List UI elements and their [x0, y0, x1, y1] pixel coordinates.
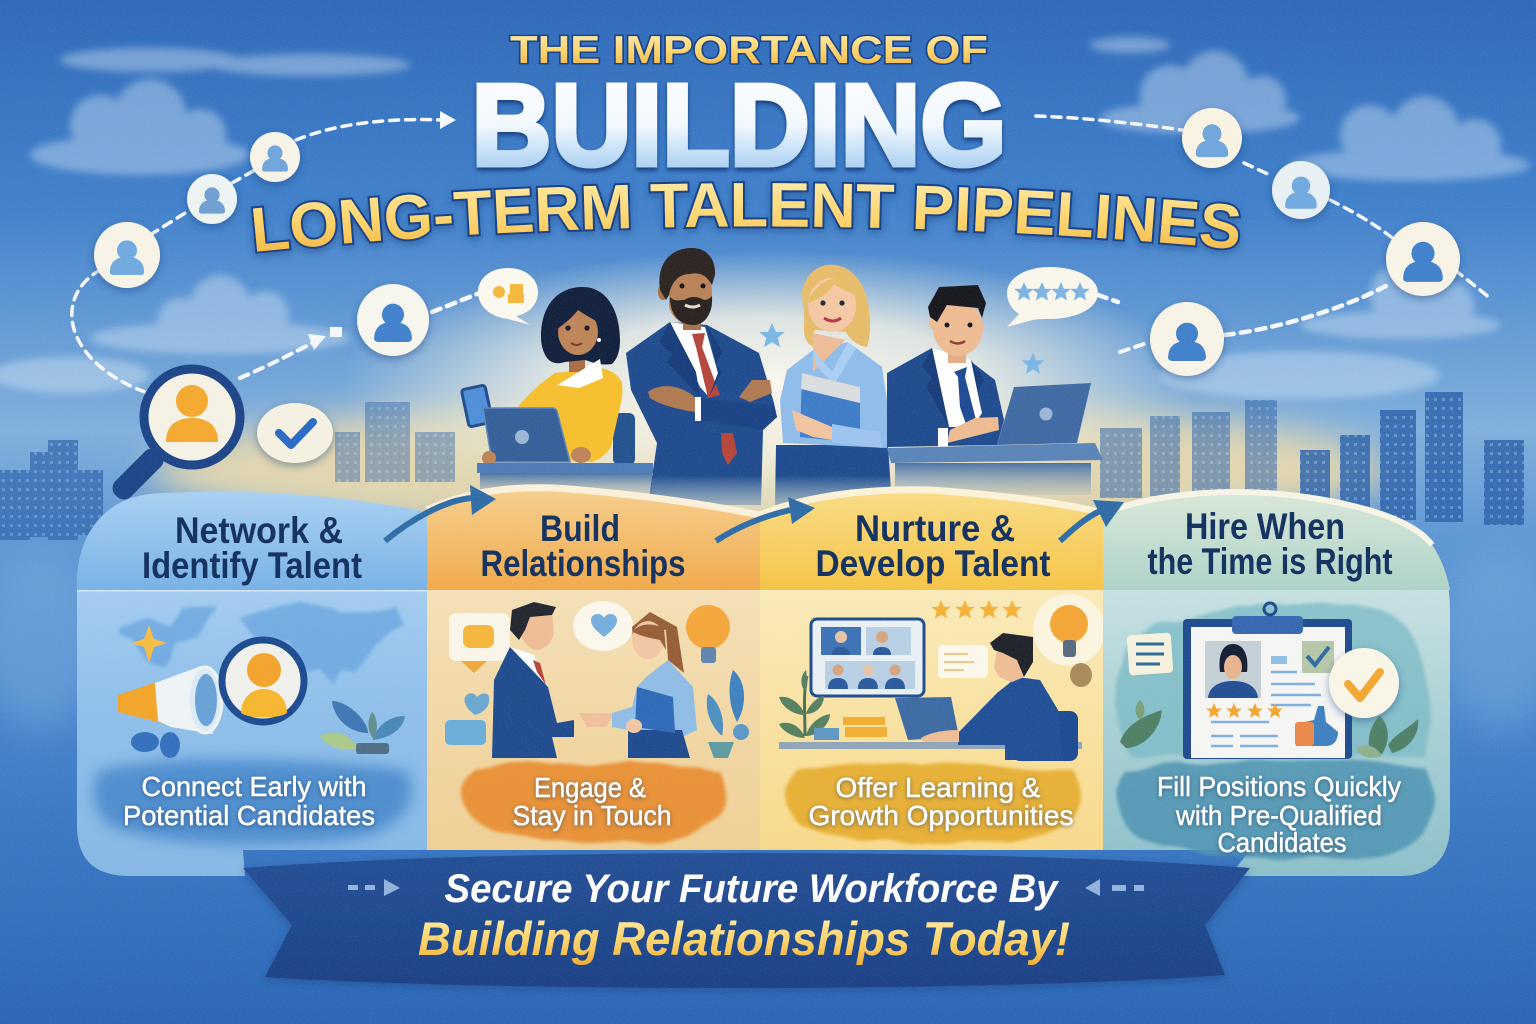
panel 2 background — [427, 488, 760, 850]
arrow: step 3 to 4 — [1060, 500, 1124, 541]
icon: note — [1127, 633, 1173, 675]
panel 1 caption: Potential Candidates — [123, 800, 375, 831]
panel 4 heading: Hire When — [1185, 506, 1345, 547]
avatar bubbles — [94, 108, 1460, 376]
icon: light bulb bubble — [1033, 594, 1105, 687]
panel 1 heading: Network & — [175, 510, 343, 551]
title line 1: THE IMPORTANCE OF — [510, 29, 988, 72]
team: blonde woman with folder — [775, 265, 892, 505]
chat bubble: stars — [1007, 267, 1098, 327]
orange brush stroke — [463, 763, 725, 843]
banner line 2: Building Relationships Today! — [418, 912, 1070, 965]
step arrows — [385, 485, 1124, 541]
panel 4 caption: Fill Positions Quickly — [1157, 771, 1401, 802]
banner line 1: Secure Your Future Workforce By — [444, 867, 1059, 911]
panel 3 heading: Develop Talent — [816, 543, 1050, 584]
panel 2 caption — [512, 772, 672, 831]
panel 1 heading: Identify Talent — [142, 545, 362, 586]
panel 3 heading — [816, 508, 1050, 584]
team: man in suit with crossed arms — [626, 248, 777, 505]
dashed pipeline arrows — [72, 116, 1490, 392]
panel: network and identify talent — [77, 492, 427, 876]
check bubble — [257, 403, 333, 463]
icon: video call monitor — [811, 619, 924, 696]
world map — [118, 602, 403, 698]
arrow: step 2 to 3 — [716, 497, 815, 541]
rating stars — [931, 600, 1022, 618]
panel 1 background — [77, 492, 427, 876]
icon: big check circle — [1329, 648, 1399, 718]
panel 4 caption: with Pre-Qualified — [1175, 800, 1382, 831]
icon: small hearts and note — [445, 693, 489, 745]
panel 2 caption: Engage & — [534, 772, 646, 803]
city skyline — [0, 392, 1524, 540]
avatar — [1272, 161, 1330, 219]
panel 3 caption — [808, 772, 1074, 831]
panel: nurture and develop talent — [760, 490, 1105, 850]
icon: sparkle star — [131, 625, 167, 663]
panel: build relationships — [427, 488, 760, 850]
title — [242, 29, 1242, 305]
team: man with laptop at desk — [887, 285, 1103, 495]
candidate photo — [1205, 641, 1261, 698]
avatar — [357, 284, 429, 356]
team: woman with laptop — [461, 287, 653, 495]
panel 2 heading: Build — [540, 508, 620, 549]
magnifying glass — [108, 369, 240, 504]
panel 4 caption — [1157, 771, 1401, 858]
panel 2 heading — [480, 508, 686, 584]
decorative stars — [759, 323, 1044, 374]
icon: plants — [1120, 700, 1418, 758]
panel 4 background — [1103, 492, 1450, 876]
arrowheads — [308, 111, 456, 350]
panel 1 caption: Connect Early with — [142, 771, 366, 802]
avatar — [1182, 108, 1242, 168]
blue brush stroke — [93, 759, 412, 844]
panel 2 heading: Relationships — [480, 543, 686, 584]
icon: plant — [707, 670, 749, 758]
panel: hire when the time is right — [1103, 492, 1450, 876]
panel 2 caption: Stay in Touch — [512, 800, 672, 831]
banner ribbon — [243, 853, 1250, 988]
avatar — [94, 222, 160, 288]
panel 3 background — [760, 490, 1103, 850]
panel 3 caption: Growth Opportunities — [808, 800, 1074, 831]
panel 4 caption: Candidates — [1218, 827, 1346, 858]
arrow: step 1 to 2 — [385, 485, 496, 541]
icon: light bulb — [686, 605, 730, 663]
title line 2: BUILDING — [472, 60, 1006, 190]
icon: plant and books — [779, 670, 887, 740]
chat bubble: yellow shapes — [478, 268, 538, 325]
icon: heart bubble — [573, 601, 633, 651]
teal blob — [1116, 603, 1429, 757]
icon: chat bubble left — [449, 613, 510, 673]
figure: businessman — [492, 602, 615, 758]
panel 4 heading: the Time is Right — [1148, 541, 1392, 582]
figure: man at laptop — [779, 633, 1082, 761]
avatar — [187, 174, 237, 224]
icon: megaphone — [118, 666, 222, 758]
panel 4 heading — [1148, 506, 1392, 582]
panel 1 caption — [123, 771, 375, 831]
panel 3 heading: Nurture & — [855, 508, 1015, 549]
icon: plant — [320, 701, 405, 754]
icon: magnifier with person — [222, 640, 304, 722]
panel 3 caption: Offer Learning & — [836, 772, 1041, 803]
icon: clipboard with candidate profile — [1183, 603, 1352, 759]
blue-green brush stroke — [1115, 761, 1434, 858]
banner dashes right — [1085, 879, 1144, 896]
avatar — [1150, 302, 1224, 376]
panel 1 heading — [142, 510, 362, 586]
gold brush stroke — [786, 763, 1084, 843]
avatar — [1386, 222, 1460, 296]
banner dashes left — [348, 879, 400, 896]
figure: businesswoman — [612, 612, 697, 758]
title line 3: LONG-TERM TALENT PIPELINES — [248, 181, 1242, 259]
icon: thumbs up — [1295, 706, 1338, 746]
icon: chat bubble — [938, 645, 988, 678]
avatar — [250, 132, 300, 182]
